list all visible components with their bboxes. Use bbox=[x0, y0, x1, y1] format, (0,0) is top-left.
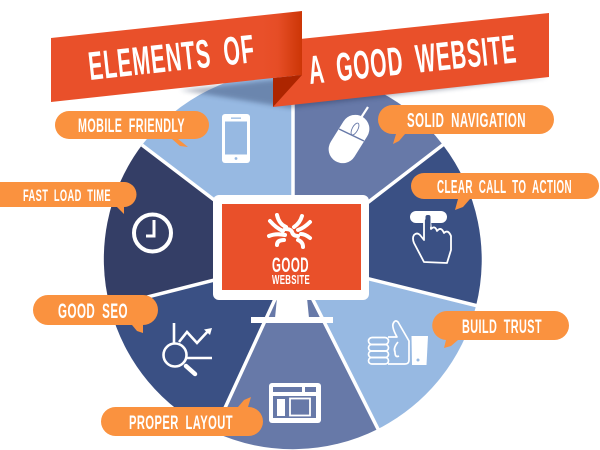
icon: pointing hand bbox=[410, 211, 451, 263]
pie wheel bbox=[104, 70, 482, 449]
banner: left ribbon bbox=[51, 11, 302, 102]
callout: clear call to action bbox=[411, 173, 599, 210]
sector: clear call to action bbox=[293, 145, 482, 306]
callout: build trust bbox=[432, 311, 569, 348]
spokes bbox=[108, 70, 478, 434]
logo mark bbox=[269, 215, 310, 247]
callout: proper layout: PROPER LAYOUT bbox=[129, 412, 233, 434]
banner: fold bbox=[273, 75, 302, 107]
icon: seo magnifier chart bbox=[164, 323, 212, 374]
icon: clock bbox=[134, 214, 171, 252]
icon: mouse bbox=[323, 107, 375, 168]
sector: good seo bbox=[110, 260, 293, 432]
logo text: website: WEBSITE bbox=[272, 273, 310, 287]
callout: good seo: GOOD SEO bbox=[58, 299, 128, 323]
callout: mobile friendly bbox=[55, 111, 209, 147]
callout: fast load time: FAST LOAD TIME bbox=[23, 186, 111, 205]
monitor bbox=[213, 195, 369, 323]
sector: build trust bbox=[293, 260, 476, 429]
callout: mobile friendly: MOBILE FRIENDLY bbox=[78, 115, 185, 137]
title: elements of: ELEMENTS OF bbox=[86, 27, 257, 89]
sector: solid navigation bbox=[293, 70, 443, 260]
logo text: good: GOOD bbox=[272, 254, 309, 277]
sector: mobile friendly bbox=[142, 70, 293, 260]
title banner bbox=[51, 11, 549, 107]
banner shadow bbox=[180, 77, 549, 108]
monitor stand bbox=[275, 298, 309, 318]
monitor screen bbox=[222, 204, 361, 290]
icon: thumbs up bbox=[368, 321, 428, 365]
callout: fast load time bbox=[0, 182, 136, 214]
callout: good seo bbox=[33, 295, 158, 333]
icon: phone bbox=[222, 114, 250, 163]
monitor frame bbox=[213, 195, 369, 300]
banner: right ribbon bbox=[273, 13, 549, 107]
sector: fast load time bbox=[104, 145, 293, 307]
sector: proper layout bbox=[214, 260, 378, 449]
icon: browser layout bbox=[269, 383, 321, 423]
callout: proper layout bbox=[101, 397, 263, 436]
callout: solid navigation bbox=[378, 105, 554, 144]
